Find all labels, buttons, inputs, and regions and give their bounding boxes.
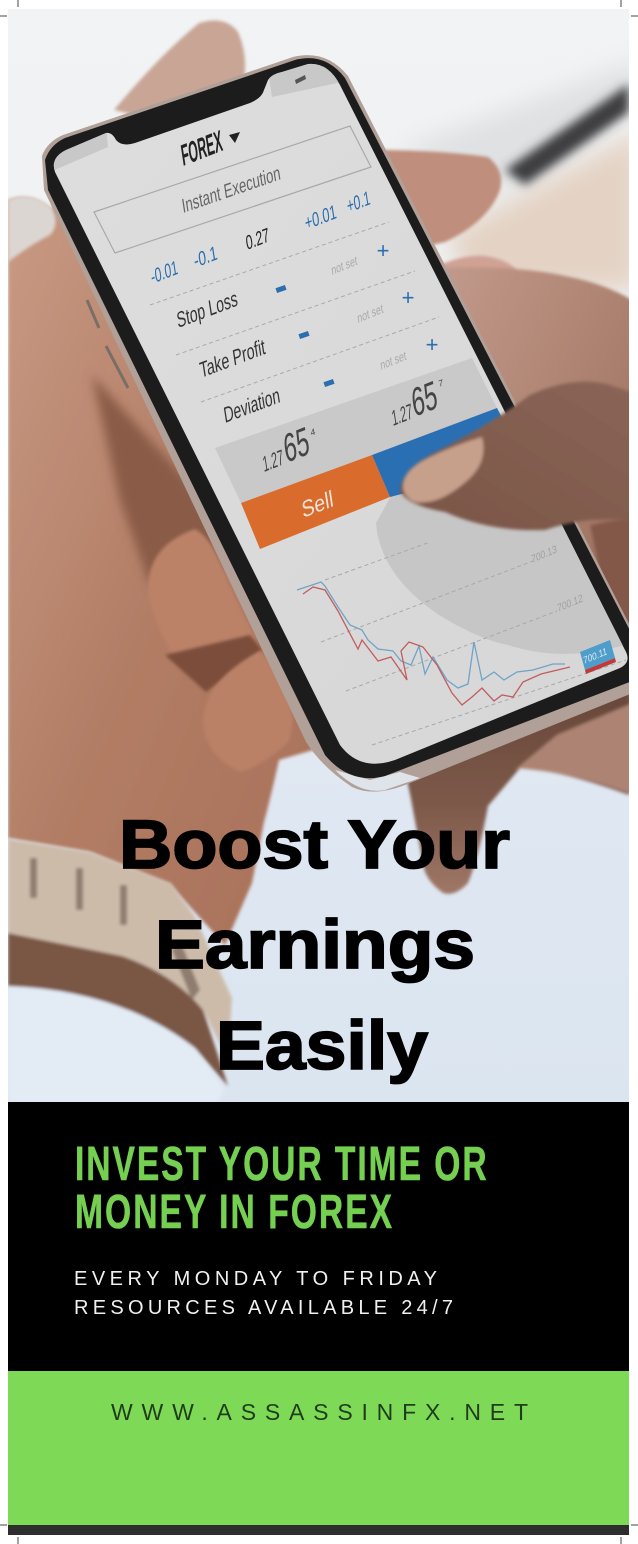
schedule text <box>74 1268 453 1319</box>
label: Instant Execution <box>180 162 282 218</box>
thumb nail <box>8 196 56 262</box>
phone bottom highlight <box>335 770 420 791</box>
lot size row: -0.01 <box>149 257 179 289</box>
heading: INVEST YOUR TIME OR <box>75 1136 487 1190</box>
take profit row: not set <box>356 300 384 326</box>
left hand <box>8 196 330 945</box>
swoosh shadow <box>376 494 623 654</box>
website: WWW.ASSASSINFX.NET <box>111 1399 528 1425</box>
row dividers <box>150 222 439 402</box>
photo background <box>8 9 629 1102</box>
watch <box>8 839 232 1102</box>
price band <box>215 358 497 503</box>
deviation row: + <box>426 332 438 357</box>
right hand <box>446 267 629 706</box>
panel: green website band <box>8 1371 629 1525</box>
heading: MONEY IN FOREX <box>75 1184 392 1238</box>
price tag <box>580 640 616 674</box>
phone bezel <box>45 58 638 778</box>
title line 2: Earnings <box>155 906 475 983</box>
title line 1: Boost Your <box>119 806 510 883</box>
schedule text: EVERY MONDAY TO FRIDAY <box>74 1268 437 1290</box>
bottom bar <box>8 1525 629 1535</box>
hand below phone <box>405 680 638 894</box>
screen <box>40 50 638 780</box>
sell price: 4 <box>310 426 316 438</box>
lot size row: +0.01 <box>303 201 338 235</box>
ask line <box>297 582 565 688</box>
title line 3: Easily <box>216 1007 428 1084</box>
stop loss row <box>177 245 388 327</box>
stop loss row: not set <box>330 252 358 278</box>
blurred dark object <box>505 84 629 185</box>
FOREX selector <box>180 130 240 166</box>
sleeve <box>8 986 224 1102</box>
shadow under finger <box>165 635 262 692</box>
sell price: 65 <box>281 419 312 472</box>
sell price: 1.27 <box>261 444 285 477</box>
bracelet links <box>30 858 200 1000</box>
blurred desk objects <box>418 67 629 296</box>
buy price <box>392 379 442 426</box>
deviation row: Deviation <box>222 382 282 428</box>
price chart <box>297 542 626 745</box>
web between thumb and fingers <box>92 375 225 585</box>
index finger <box>148 529 256 657</box>
sell button <box>241 455 390 549</box>
FOREX selector: FOREX <box>179 124 225 173</box>
right header band <box>269 64 339 97</box>
phone side buttons <box>87 300 128 388</box>
take profit row <box>199 292 414 377</box>
buy button <box>372 408 525 497</box>
middle finger <box>203 651 293 772</box>
price tag: 700.11 <box>583 646 608 667</box>
bid line <box>303 587 570 705</box>
grid labels: 700.13 <box>531 543 558 566</box>
grid labels <box>531 543 584 615</box>
buy price: 7 <box>438 377 444 389</box>
panel: black info band <box>8 1102 629 1371</box>
back fingers <box>114 20 520 290</box>
lot size row: -0.1 <box>192 242 219 273</box>
schedule text: RESOURCES AVAILABLE 24/7 <box>74 1297 453 1319</box>
buy price: 1.27 <box>390 398 414 431</box>
phone silver frame <box>42 55 638 792</box>
lot size row <box>152 192 370 282</box>
lot size row: +0.1 <box>345 187 372 218</box>
deviation row <box>224 339 438 423</box>
lot size row: 0.27 <box>244 224 271 255</box>
left header band <box>54 133 108 170</box>
thumb nail <box>403 437 484 502</box>
right thumb on screen <box>400 382 638 530</box>
title <box>119 806 510 1084</box>
buy price: 65 <box>409 373 440 426</box>
sell button: Sell <box>300 485 335 523</box>
chart grid <box>321 542 626 745</box>
take profit row: Take Profit <box>198 334 267 383</box>
bracelet <box>8 839 232 1060</box>
palm and thumb <box>8 197 330 945</box>
phone <box>40 50 638 792</box>
heading <box>75 1136 487 1238</box>
deviation row: not set <box>379 347 407 373</box>
photo: hands holding a phone <box>8 9 638 1102</box>
stop loss row: + <box>377 238 389 263</box>
instant execution box <box>94 126 371 253</box>
outline <box>94 126 371 253</box>
take profit row: + <box>402 285 414 310</box>
sell price <box>263 427 316 472</box>
stop loss row: Stop Loss <box>175 285 239 333</box>
wrist shadow <box>8 933 228 1086</box>
dropdown arrow <box>229 132 240 143</box>
status icons <box>295 75 306 84</box>
grid labels: 700.12 <box>557 592 584 615</box>
